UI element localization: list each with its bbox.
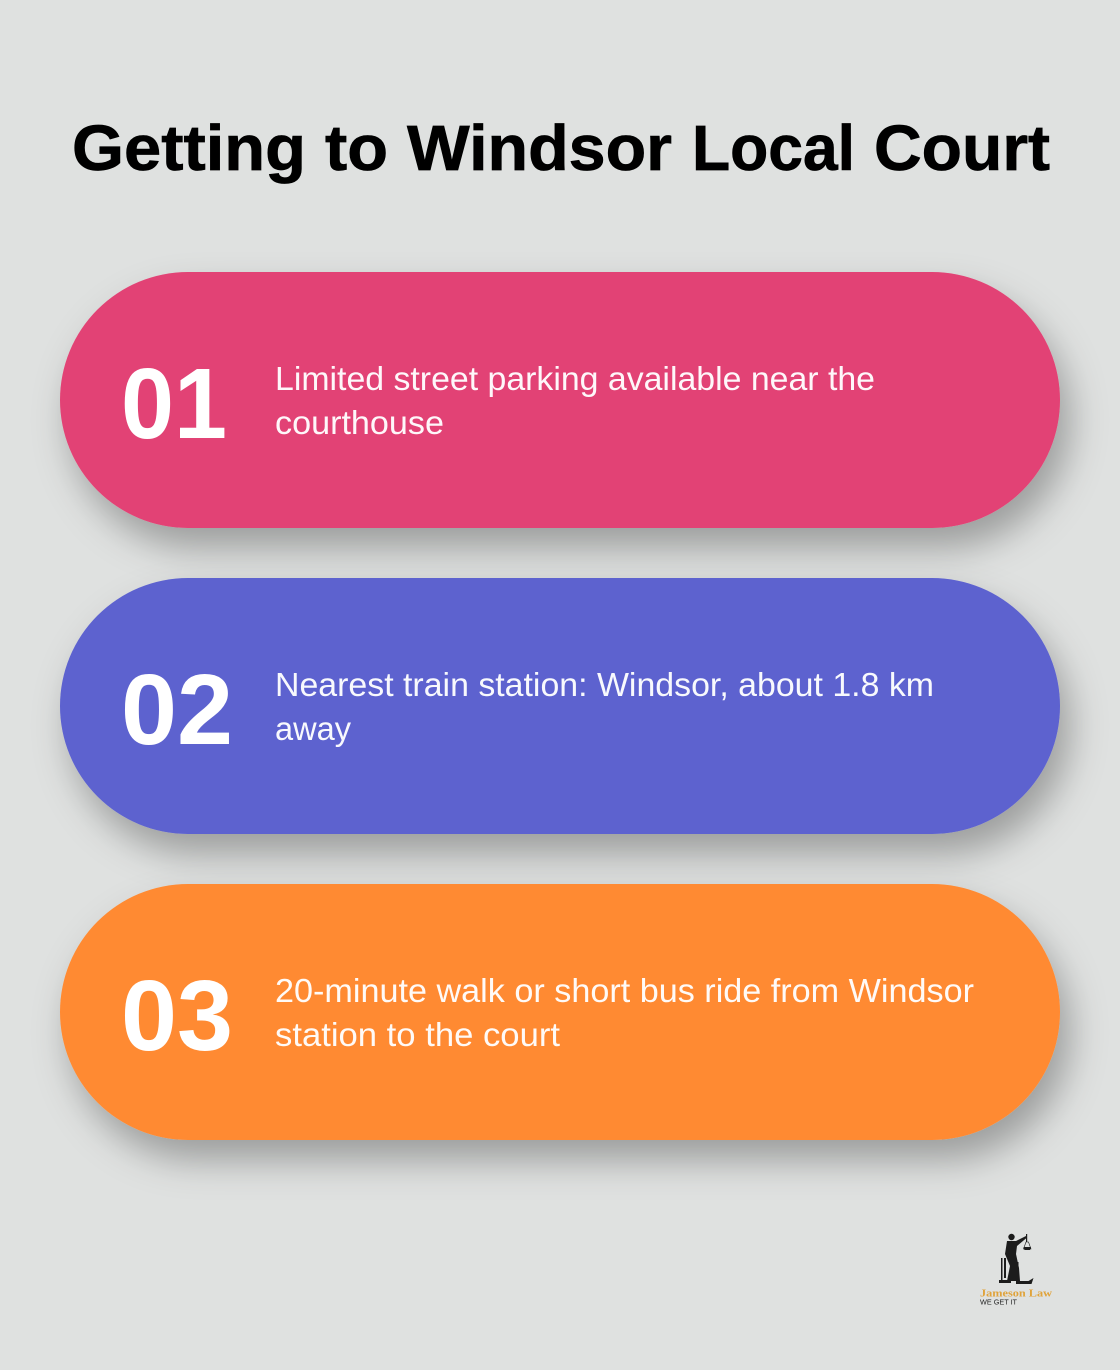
title: Local [692, 112, 855, 184]
panel: step 02 [60, 578, 1060, 834]
text 03: 20-minute walk or short bus ride from Windsor [275, 972, 974, 1009]
text 02: Nearest train station: Windsor, about 1.8 km [275, 666, 934, 703]
title: to [325, 112, 388, 184]
title: Windsor [407, 112, 672, 184]
icon: lady justice with L [999, 1234, 1034, 1284]
pill background 01 [60, 272, 1060, 528]
pill background 03 [60, 884, 1060, 1140]
text 01: courthouse [275, 404, 444, 441]
number 02: 02 [121, 654, 233, 766]
text 01: Limited street parking available near the [275, 360, 875, 397]
title: Getting [72, 112, 306, 184]
text 03 [275, 972, 974, 1053]
number 03: 03 [121, 960, 233, 1072]
text 02 [275, 666, 934, 747]
panel: step 01 [60, 272, 1060, 528]
panel: step 03 [60, 884, 1060, 1140]
text 03: station to the court [275, 1016, 560, 1053]
logo: Jameson Law [980, 1234, 1052, 1306]
logo name: Jameson Law [980, 1288, 1052, 1300]
logo tagline: WE GET IT [980, 1298, 1017, 1306]
text 01 [275, 360, 875, 441]
title: Court [874, 112, 1050, 184]
text 02: away [275, 710, 351, 747]
number 01: 01 [121, 348, 227, 460]
pill background 02 [60, 578, 1060, 834]
title [72, 112, 1050, 184]
